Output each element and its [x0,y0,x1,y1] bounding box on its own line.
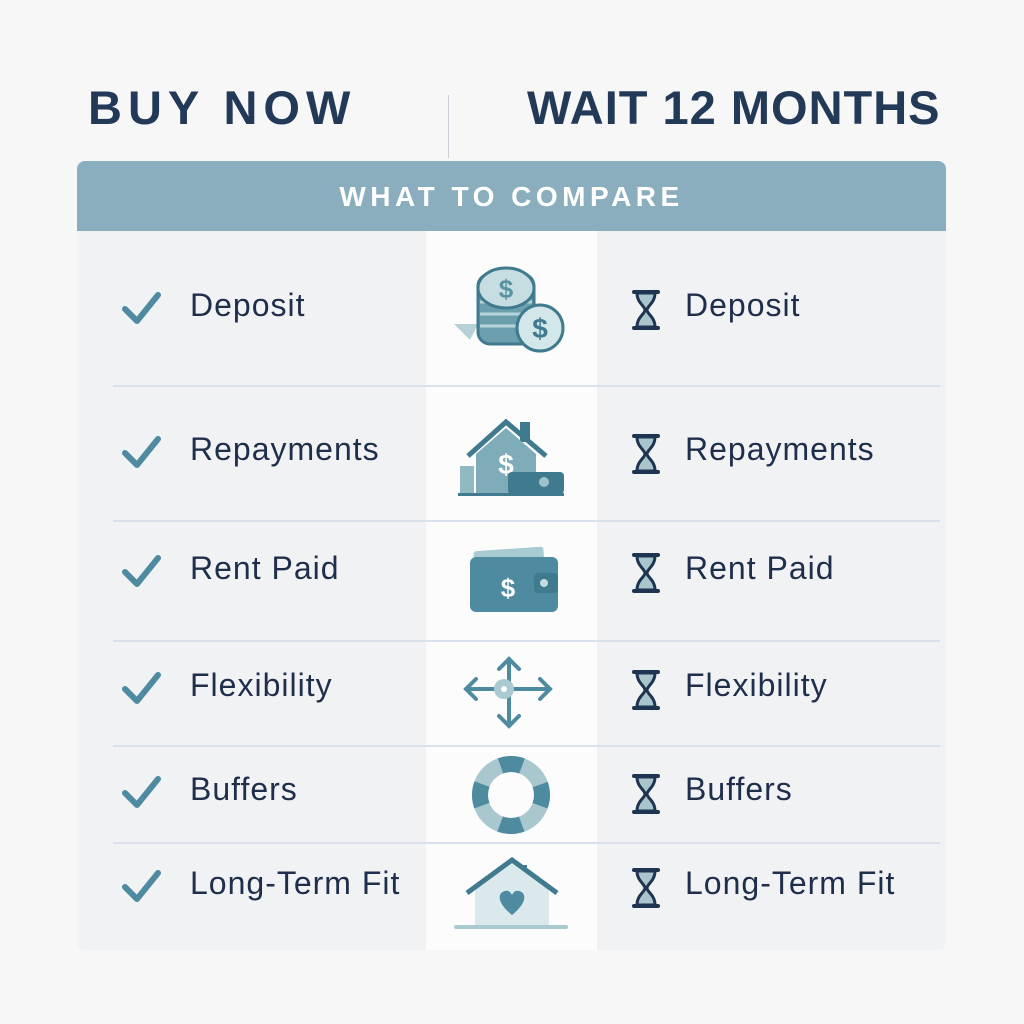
icon: coins [454,266,564,352]
row: flexibility right [632,667,828,710]
icon: arrows [463,656,553,729]
heading: wait 12 months: WAIT 12 MONTHS [527,81,941,134]
row: long-term fit left: Long-Term Fit [190,865,400,901]
left column items [122,287,400,902]
header band: WHAT TO COMPARE [339,181,684,212]
row: deposit left: Deposit [190,287,306,323]
row: buffers left: Buffers [190,771,298,807]
row: flexibility right: Flexibility [685,667,828,703]
panel: comparison table [77,161,946,950]
icon: wallet: $ [501,573,516,603]
icon: house with wallet [458,418,564,496]
row: buffers right: Buffers [685,771,793,807]
row: flexibility left: Flexibility [190,667,333,703]
row: long-term fit right: Long-Term Fit [685,865,895,901]
row: rent paid right [632,550,835,593]
right column items [632,287,895,908]
header band [77,161,946,231]
row: repayments right [632,431,875,474]
row: rent paid left: Rent Paid [190,550,340,586]
heading: buy now: BUY NOW [88,81,356,134]
row: repayments left: Repayments [190,431,380,467]
row: repayments right: Repayments [685,431,875,467]
icon: life ring [472,756,550,834]
icon: house with heart [454,857,568,929]
row: deposit right: Deposit [685,287,800,323]
icon: house with wallet: $ [498,449,514,480]
row: deposit right [632,287,800,330]
icon: coins: $ [499,274,514,304]
row: deposit left [122,287,306,324]
row: buffers right [632,771,793,814]
row: rent paid right: Rent Paid [685,550,835,586]
row: buffers left [122,771,298,808]
row: long-term fit right [632,865,895,908]
row: flexibility left [122,667,333,704]
row: rent paid left [122,550,340,587]
icon: wallet [470,546,558,612]
icon: coins: $ [532,313,548,344]
